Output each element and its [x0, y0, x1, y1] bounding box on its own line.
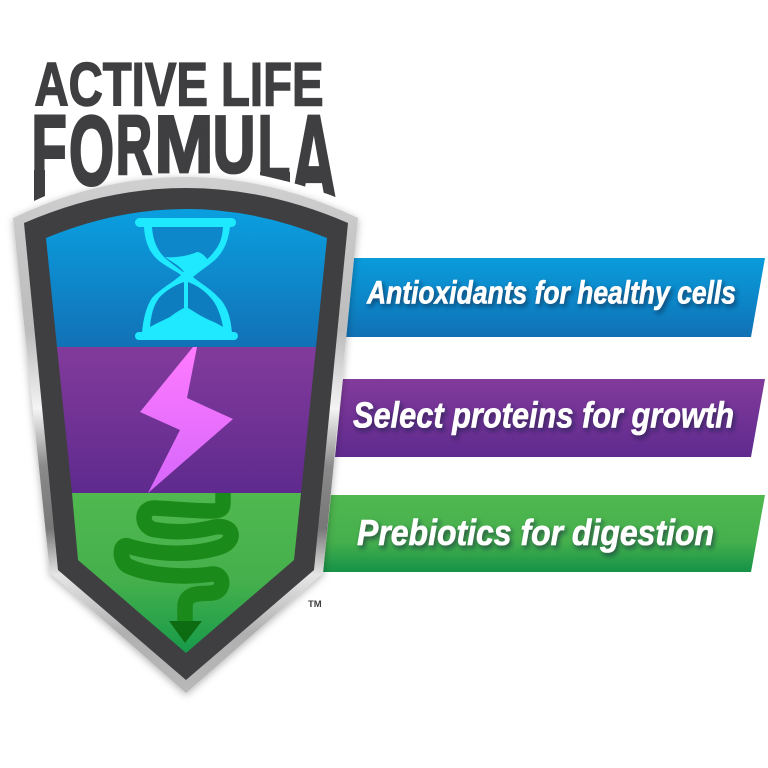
title line: formula: U [213, 99, 255, 189]
shield [13, 177, 358, 693]
shield band: purple [57, 347, 316, 493]
banner: prebiotics [323, 495, 765, 572]
shield band: blue [46, 209, 327, 347]
banner: prebiotics: Prebiotics for digestion [357, 512, 714, 553]
title line: formula [34, 114, 336, 201]
title line: formula: F [31, 96, 67, 202]
shield silver rim [13, 177, 358, 693]
title line: formula: M [154, 99, 213, 190]
title line: formula: L [258, 96, 290, 199]
title line: formula: R [116, 99, 152, 192]
trademark mark: TM [308, 599, 322, 610]
title line: formula: O [69, 97, 114, 206]
shield band: green [72, 493, 301, 653]
icon: hourglass [135, 218, 238, 340]
banner: antioxidants [346, 258, 765, 337]
icon: intestine [121, 493, 231, 643]
shield dark border [24, 188, 348, 680]
icon: lightning bolt [140, 347, 233, 493]
title [34, 62, 336, 201]
banner: proteins [335, 379, 765, 457]
title line: formula: A [290, 90, 338, 231]
title line: active life: ACTIVE LIFE [34, 50, 324, 118]
